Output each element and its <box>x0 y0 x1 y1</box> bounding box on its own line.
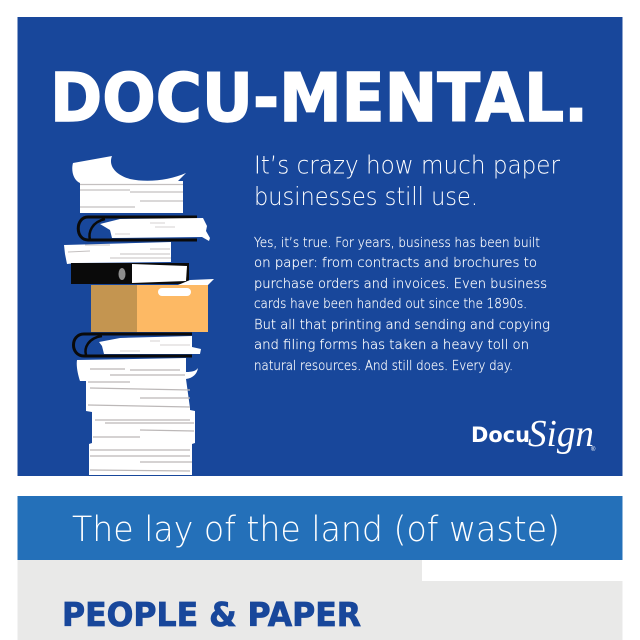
body text: on paper: from contracts and brochures to <box>254 255 537 271</box>
black binder upper <box>78 217 210 241</box>
cardboard box <box>91 279 214 332</box>
subheading: It’s crazy how much paper <box>254 150 561 180</box>
logo: DocuSign <box>471 413 596 455</box>
panel: people and paper <box>18 560 622 640</box>
panel: blue hero <box>18 17 622 476</box>
body text: and filing forms has taken a heavy toll on <box>254 337 529 353</box>
band heading: The lay of the land (of waste) <box>72 510 560 550</box>
body text: cards have been handed out since the 1890s. <box>254 296 527 312</box>
white sheets middle <box>64 242 171 264</box>
black ring binder <box>71 263 189 284</box>
section heading: PEOPLE & PAPER <box>62 595 361 634</box>
black binder lower <box>74 334 201 356</box>
section band <box>18 496 622 560</box>
illustration: stack of paper, binders and box <box>64 156 214 475</box>
logo: DocuSign: Docu <box>471 423 530 447</box>
title: DOCU-MENTAL. <box>50 59 588 137</box>
body text: purchase orders and invoices. Even business <box>254 276 547 292</box>
logo: DocuSign: Sign <box>528 413 594 455</box>
subheading: businesses still use. <box>254 182 478 211</box>
body text: But all that printing and sending and copying <box>254 317 550 333</box>
subheading <box>254 150 561 211</box>
body text: Yes, it’s true. For years, business has been built <box>254 235 540 251</box>
body text: natural resources. And still does. Every day. <box>254 358 513 374</box>
body text <box>254 235 550 374</box>
logo: DocuSign: ® <box>591 446 596 453</box>
top paper stack <box>72 156 186 213</box>
bottom paper stack <box>77 358 198 475</box>
